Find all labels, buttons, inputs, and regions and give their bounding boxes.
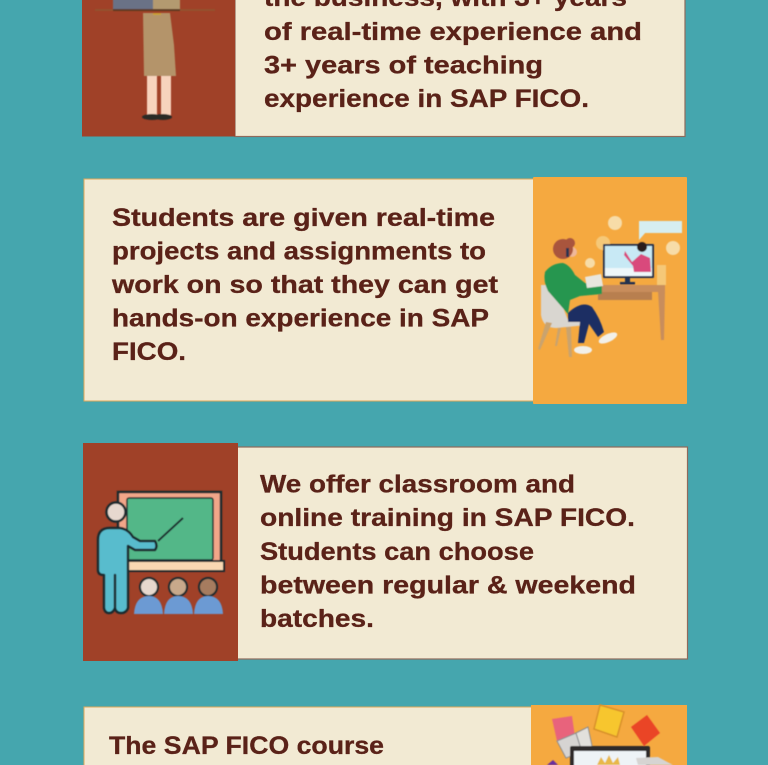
card body	[237, 447, 688, 659]
card text: The SAP FICO course	[109, 732, 384, 760]
card text	[111, 204, 499, 366]
card text: FICO.	[112, 338, 186, 366]
icon: books around laptop	[547, 705, 673, 765]
card text: batches.	[260, 605, 374, 633]
panel: classroom and online training	[83, 443, 688, 661]
card text: online training in SAP FICO.	[260, 504, 635, 532]
panel: course content	[84, 705, 687, 765]
icon: teacher at chalkboard	[98, 492, 224, 614]
card text: of real-time experience and	[264, 18, 642, 46]
card text	[260, 470, 636, 633]
card text	[264, 0, 642, 113]
card text: projects and assignments to	[112, 238, 486, 266]
card body	[235, 0, 685, 136]
card body	[84, 179, 534, 401]
card text: hands-on experience in SAP	[112, 304, 489, 332]
card body	[84, 707, 532, 765]
card text: work on so that they can get	[111, 271, 499, 299]
image panel	[531, 705, 687, 765]
card text: Students can choose	[260, 538, 534, 566]
card text: experience in SAP FICO.	[264, 85, 589, 113]
panel: instructor experience	[82, 0, 685, 136]
card text: between regular & weekend	[260, 572, 636, 600]
card text: 3+ years of teaching	[264, 52, 543, 80]
image panel	[82, 0, 235, 136]
card text: Students are given real-time	[112, 204, 495, 232]
icon: student on video call	[538, 216, 682, 357]
panel: real-time projects	[84, 177, 687, 404]
card text: We offer classroom and	[260, 470, 575, 498]
image panel	[533, 177, 687, 404]
image panel	[83, 443, 238, 661]
icon: standing teacher	[95, 0, 215, 120]
